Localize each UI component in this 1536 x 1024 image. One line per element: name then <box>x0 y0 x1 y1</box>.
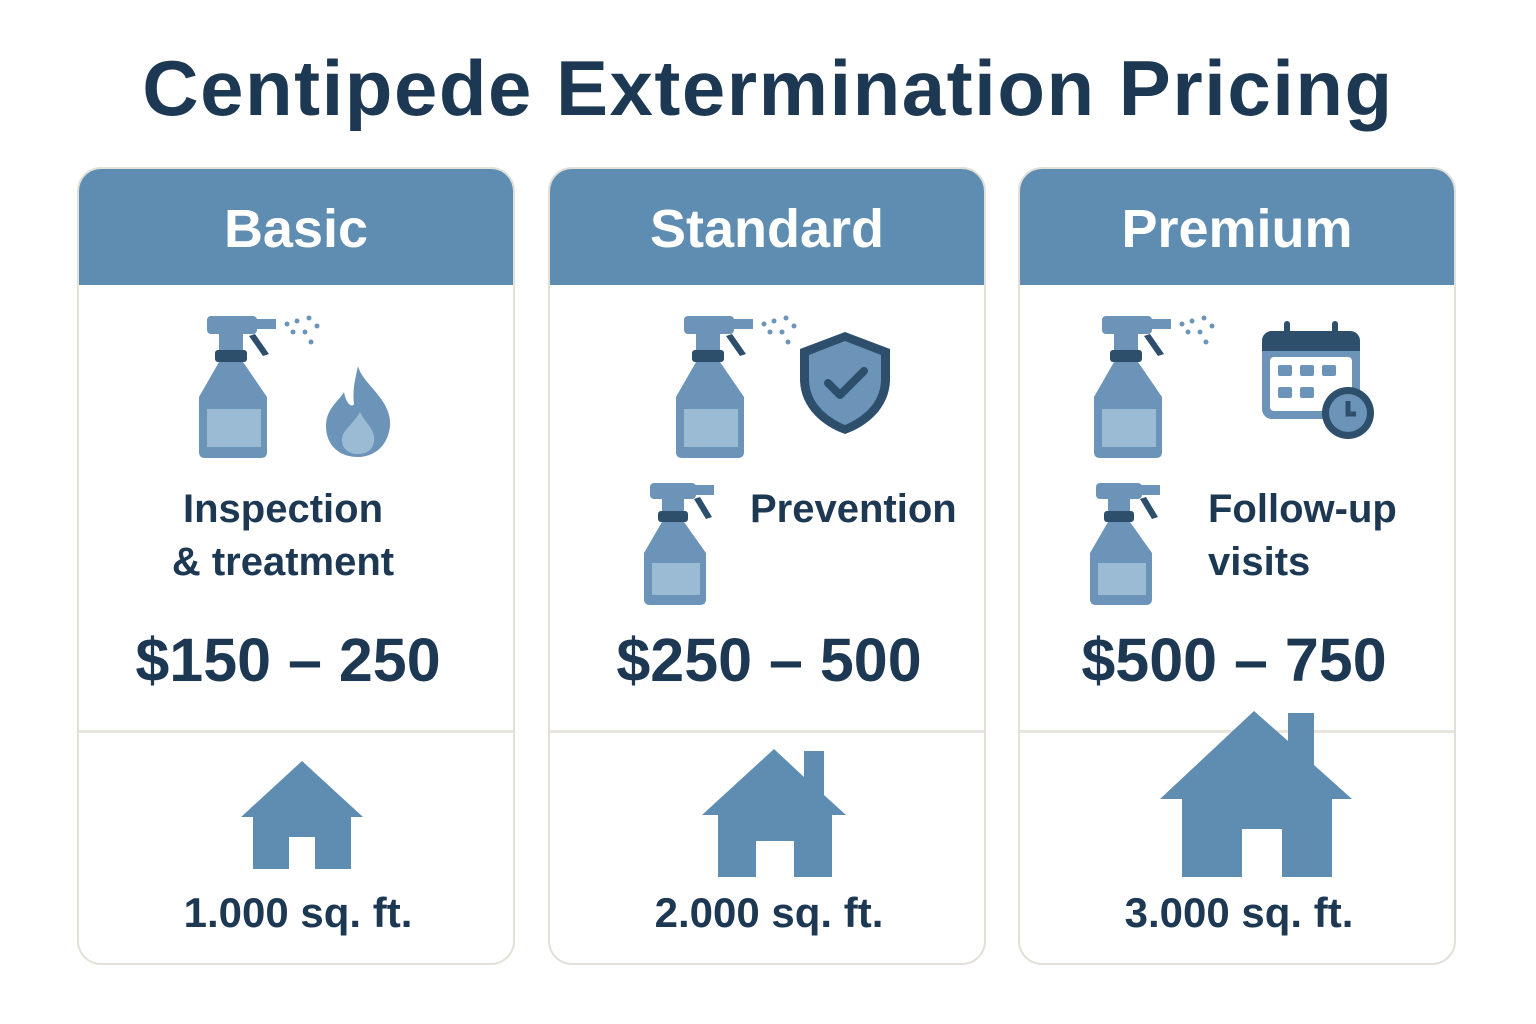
icon: medium house <box>702 749 846 877</box>
text: follow-up visits: Follow-up <box>1208 487 1397 531</box>
header: premium <box>1020 169 1454 285</box>
panel: basic <box>77 167 515 965</box>
icon: spray bottle <box>1094 316 1214 458</box>
price: standard: $250 – 500 <box>616 626 922 694</box>
icon: small house <box>241 761 363 869</box>
header: standard <box>550 169 984 285</box>
panel: standard <box>548 167 986 965</box>
text: inspection & treatment: Inspection <box>183 487 383 531</box>
header: premium: Premium <box>1121 199 1353 259</box>
icon: shield <box>800 332 890 434</box>
text: follow-up visits: visits <box>1208 540 1310 584</box>
icon: fire <box>326 366 390 457</box>
header: basic <box>79 169 513 285</box>
text: prevention: Prevention <box>750 487 957 531</box>
header: basic: Basic <box>224 199 368 259</box>
text: 3.000 sq. ft.: 3.000 sq. ft. <box>1125 889 1353 936</box>
text: 1.000 sq. ft.: 1.000 sq. ft. <box>184 889 412 936</box>
text: follow-up visits <box>1208 487 1397 584</box>
icon: large house <box>1160 711 1352 877</box>
icon: small spray bottle <box>644 483 714 605</box>
price: basic: $150 – 250 <box>135 626 441 694</box>
text: inspection & treatment: & treatment <box>172 540 394 584</box>
header: standard: Standard <box>650 199 884 259</box>
title: Centipede Extermination Pricing <box>142 44 1394 132</box>
icon: small spray bottle <box>1090 483 1160 605</box>
icon: calendar with clock <box>1262 321 1374 439</box>
price: premium: $500 – 750 <box>1081 626 1387 694</box>
text: 2.000 sq. ft.: 2.000 sq. ft. <box>655 889 883 936</box>
panel: premium <box>1018 167 1456 965</box>
icon: spray bottle <box>676 316 796 458</box>
text: inspection & treatment <box>172 487 394 584</box>
icon: spray bottle <box>199 316 320 458</box>
